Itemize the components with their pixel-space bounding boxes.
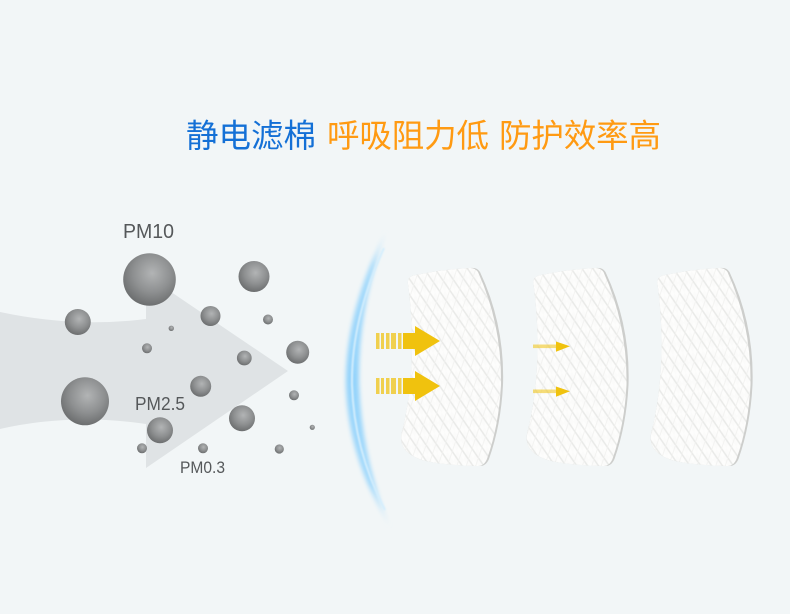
blue electrostatic arc	[346, 229, 391, 529]
title: 呼吸阻力低	[327, 118, 489, 154]
label: PM10: PM10	[123, 221, 174, 243]
large yellow arrows	[376, 326, 440, 401]
title	[186, 118, 661, 154]
label: PM0.3: PM0.3	[180, 459, 225, 477]
filter pad 1	[401, 268, 503, 466]
filter pad 2	[527, 268, 629, 466]
small yellow arrows	[533, 342, 570, 397]
particles	[61, 253, 315, 454]
label: PM2.5: PM2.5	[135, 394, 185, 414]
title: 静电滤棉	[186, 118, 316, 154]
title: 防护效率高	[499, 118, 661, 154]
large air-flow arrow	[0, 275, 288, 468]
filter pad 3	[651, 268, 753, 466]
